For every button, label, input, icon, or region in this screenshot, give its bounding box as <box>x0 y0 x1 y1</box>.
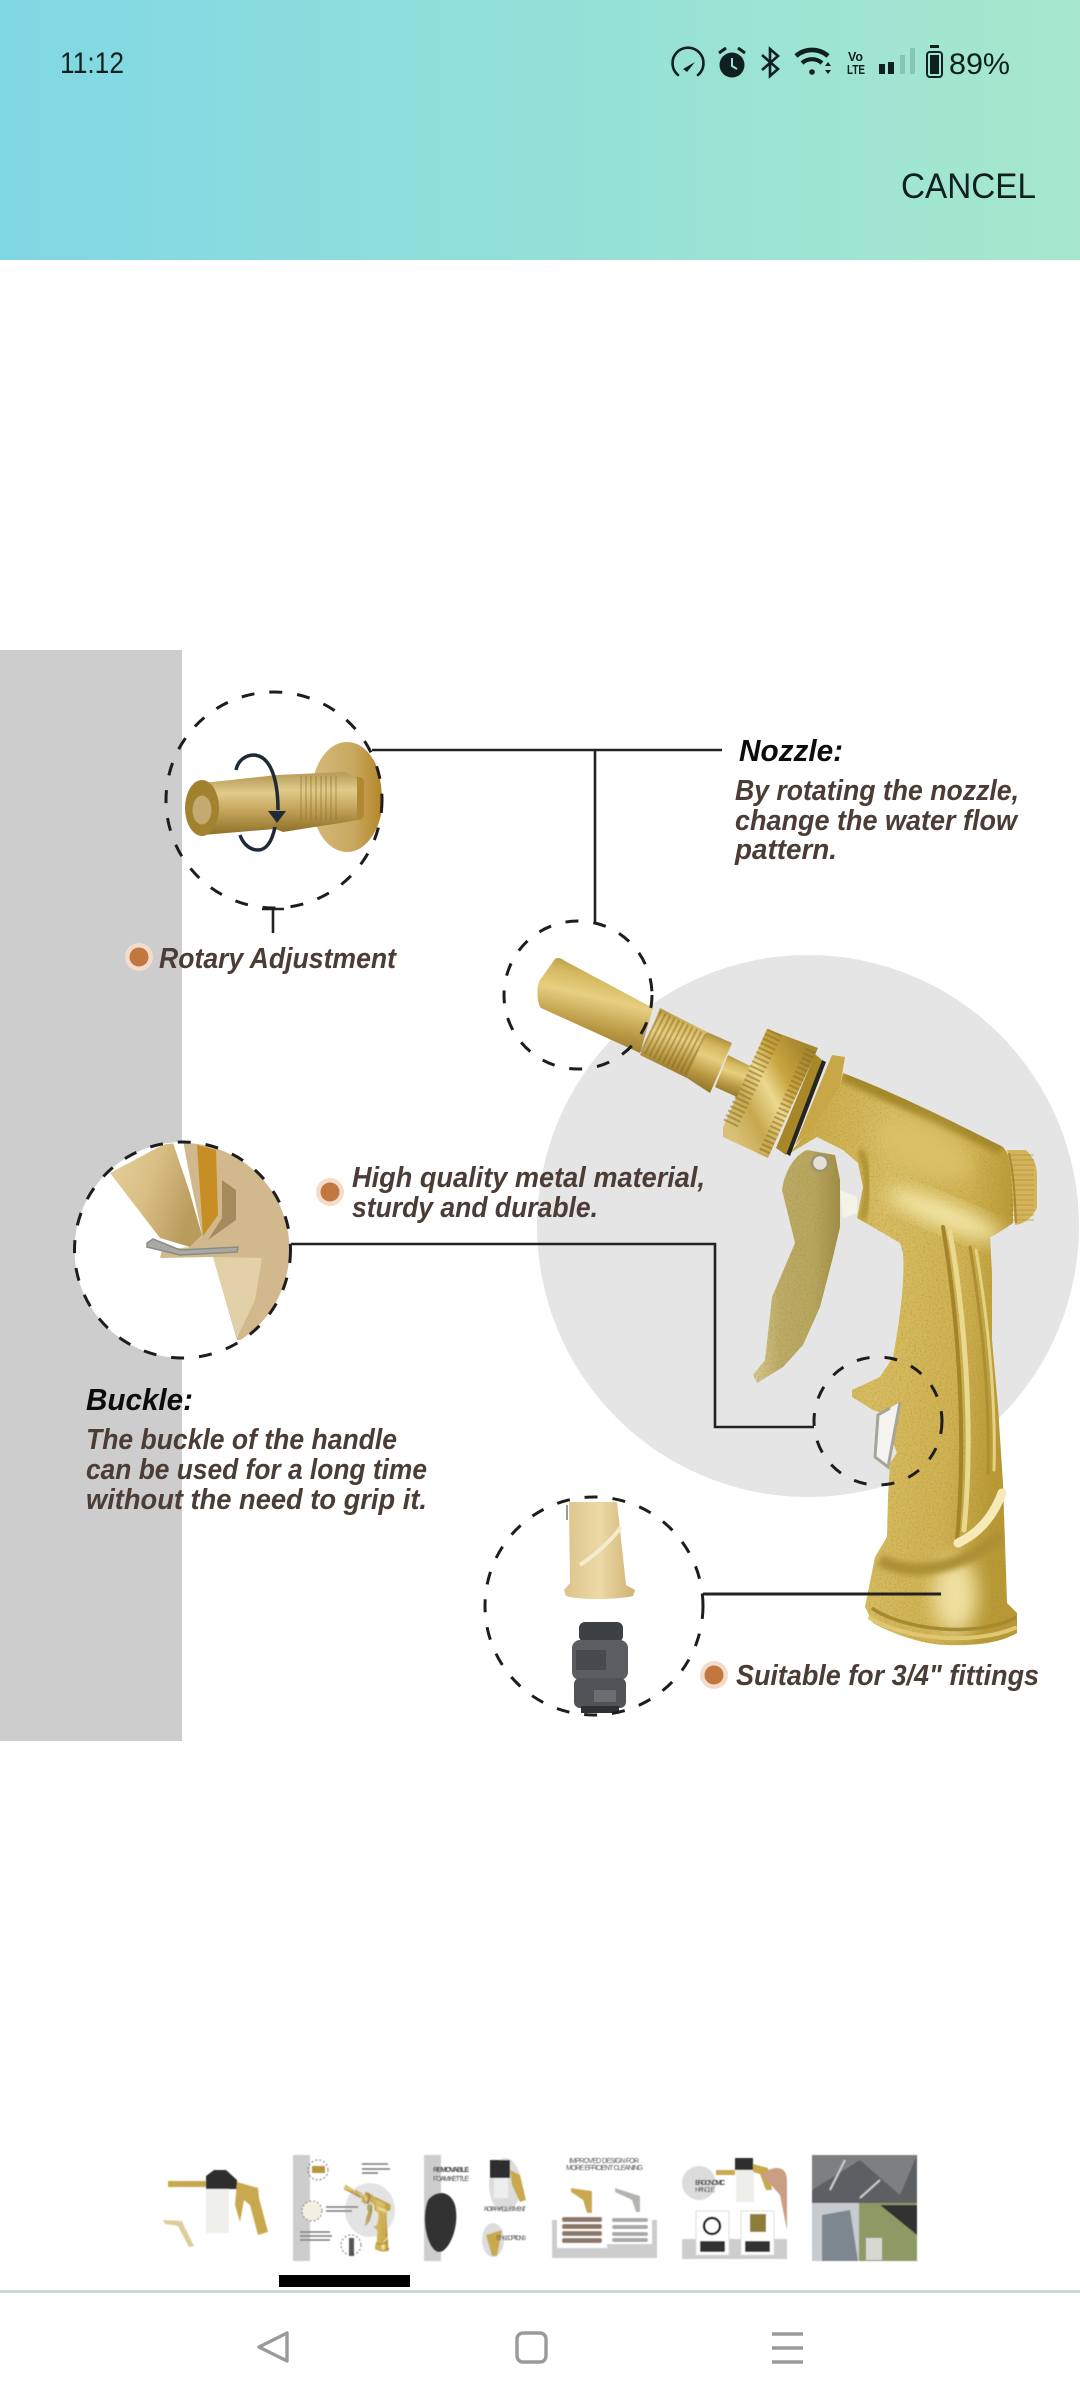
callout: metal material: High quality metal material, <box>352 1162 705 1194</box>
thumbnail 4: improved design: MORE EFFICIENT CLEANING <box>566 2165 643 2172</box>
callout: buckle text <box>86 1424 427 1516</box>
icon: signal bars <box>879 48 915 74</box>
panel: rotary detail circle <box>166 692 383 908</box>
thumbnail 5: ergonomic handle <box>682 2158 787 2259</box>
thumbnail 3: foam kettle: FOAM KETTLE <box>433 2176 469 2183</box>
metal clip wire <box>875 1402 900 1467</box>
nozzle closeup <box>185 742 383 852</box>
brass base cone <box>564 1502 635 1599</box>
callout: nozzle text: By rotating the nozzle, <box>735 775 1019 807</box>
gun body and grip <box>790 1073 1017 1645</box>
white piston <box>840 1190 857 1218</box>
callout: nozzle text: pattern. <box>734 834 837 866</box>
thumbnail 4: improved design <box>552 2158 657 2258</box>
panel: grey backdrop circle <box>537 955 1079 1497</box>
knurled adjuster <box>640 1008 707 1078</box>
icon: VoLTE: LTE <box>847 62 865 77</box>
callout: metal material <box>316 1162 705 1224</box>
callout: rotary adjustment: Rotary Adjustment <box>159 943 397 975</box>
rear knob <box>1007 1150 1037 1225</box>
thumbnail 3: foam kettle <box>424 2155 526 2261</box>
thumbnail 3: foam kettle: STYLE OPTIONS <box>496 2236 526 2242</box>
trigger <box>753 1150 840 1383</box>
callout: buckle text: can be used for a long time <box>86 1454 427 1486</box>
thumbnail 2: current image <box>293 2155 395 2261</box>
callout: metal material: sturdy and durable. <box>352 1192 598 1224</box>
icon: alarm <box>719 48 745 78</box>
thin shaft <box>715 1055 750 1097</box>
thumbnail 6: usage photos <box>812 2155 917 2261</box>
panel: grey side band <box>0 650 182 1741</box>
gold spray gun <box>537 958 1037 1645</box>
panel: buckle detail circle <box>74 1140 300 1358</box>
handle closeup <box>110 1140 300 1340</box>
buckle wire <box>147 1239 238 1255</box>
status icons <box>673 45 942 78</box>
app header bar <box>0 0 1080 260</box>
thumbnail strip <box>163 2155 917 2261</box>
thumbnail 1: gun with bottle <box>163 2170 268 2247</box>
thumbnail 4: improved design: IMPROVED DESIGN FOR <box>569 2158 639 2165</box>
icon: rotation arrow <box>236 755 286 850</box>
status bar clock: 11:12 <box>60 47 124 80</box>
threaded section <box>776 1054 822 1155</box>
cancel button: CANCEL <box>901 167 1036 206</box>
active thumbnail indicator <box>279 2275 410 2287</box>
connector: fittings line <box>703 1592 941 1596</box>
icon: battery <box>927 45 942 77</box>
icon: bluetooth <box>762 49 778 76</box>
buckle detail on gun <box>814 1357 942 1485</box>
adjuster collar <box>687 1032 732 1093</box>
thumbnail 5: ergonomic handle: ERGONOMIC <box>695 2180 725 2187</box>
circle marker <box>814 1357 942 1485</box>
nozzle barrel <box>537 958 653 1053</box>
coupling nut <box>723 1029 818 1158</box>
callout: buckle text: The buckle of the handle <box>86 1424 397 1456</box>
black adapter fitting <box>572 1622 628 1713</box>
thumbnail 5: ergonomic handle: HANDLE <box>695 2187 715 2194</box>
dashed ring <box>485 1497 703 1715</box>
connector: nozzle callout lines <box>372 750 722 923</box>
connector: rotary tick <box>262 908 284 933</box>
icon: home <box>517 2333 546 2362</box>
panel: fittings detail circle <box>485 1497 703 1715</box>
divider <box>0 2290 1080 2293</box>
icon: back <box>259 2333 287 2361</box>
connector: buckle elbow line <box>291 1244 814 1427</box>
o-ring <box>785 1060 826 1156</box>
dashed circle: nozzle marker <box>504 921 652 1069</box>
callout: buckle heading: Buckle: <box>86 1382 193 1417</box>
navigation bar <box>259 2333 803 2362</box>
icon: VoLTE: Vo <box>848 49 863 64</box>
grip grooves <box>870 1227 1015 1638</box>
dashed ring <box>166 692 382 908</box>
body shading <box>843 1073 1007 1633</box>
callout: buckle text: without the need to grip it. <box>86 1484 427 1516</box>
icon: speed gauge <box>673 48 703 75</box>
callout: nozzle text: change the water flow <box>735 805 1019 837</box>
battery percent: 89% <box>949 48 1010 81</box>
callout: nozzle heading: Nozzle: <box>739 733 843 768</box>
thumbnail 3: foam kettle: REMOVABLE <box>433 2167 469 2174</box>
dashed ring <box>74 1142 290 1358</box>
callout: nozzle text <box>734 775 1019 866</box>
thumbnail 3: foam kettle: ROTARY ADJUSTMENT <box>484 2207 526 2213</box>
icon: VoLTE <box>847 49 865 77</box>
flange <box>795 1055 845 1145</box>
icon: menu <box>772 2334 803 2362</box>
trigger pivot <box>812 1155 828 1171</box>
callout: fittings: Suitable for 3/4" fittings <box>736 1660 1039 1692</box>
icon: wifi <box>796 50 831 75</box>
